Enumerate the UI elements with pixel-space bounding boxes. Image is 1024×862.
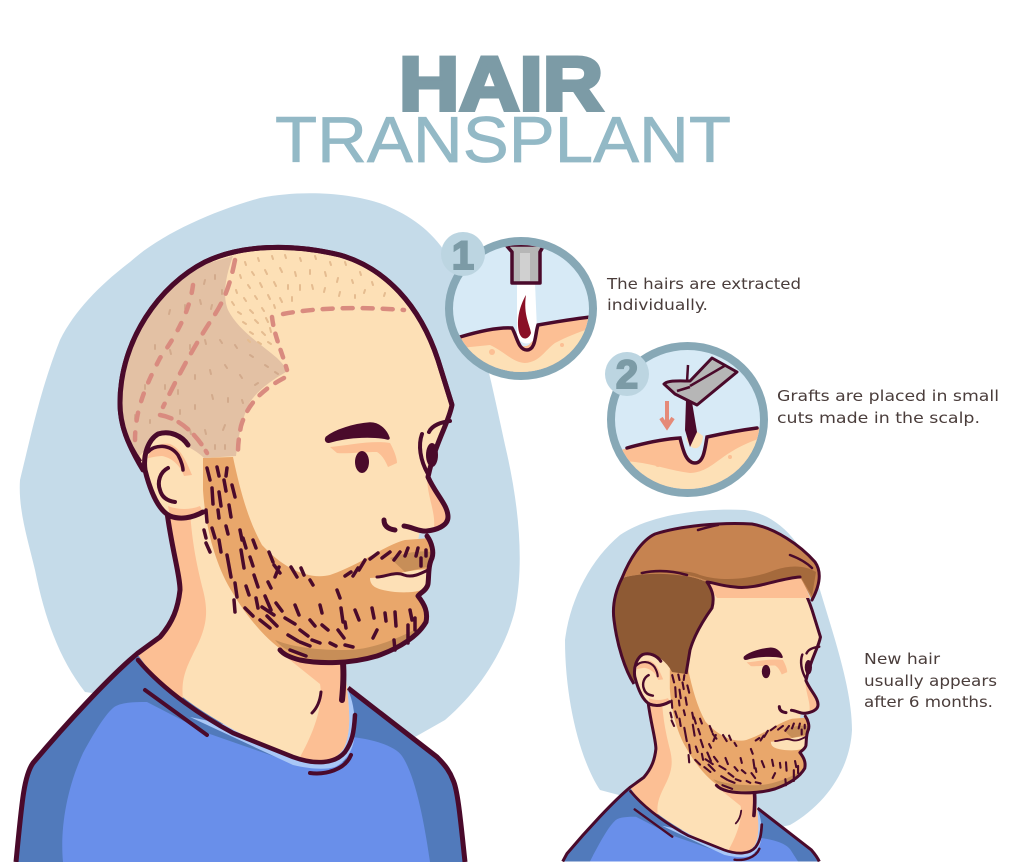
title word: HAIR: HAIR xyxy=(399,42,603,127)
shaved donor area xyxy=(121,256,286,458)
person base: neck, face, beard xyxy=(620,542,820,860)
shirt xyxy=(16,653,465,862)
dots xyxy=(656,466,660,467)
ear xyxy=(634,654,670,705)
hair side outline xyxy=(613,578,713,684)
caption: step 1 xyxy=(606,275,801,314)
caption: result: New hair xyxy=(864,650,941,668)
scalp stubble dots xyxy=(232,255,385,344)
hair follicle xyxy=(518,295,531,339)
caption: step 1: individually. xyxy=(607,296,708,314)
step 2 circle xyxy=(605,346,770,500)
ear xyxy=(145,433,203,518)
title xyxy=(275,42,731,176)
number badge 1 xyxy=(441,232,485,278)
hair strokes xyxy=(642,525,812,575)
number badge 2: 2 xyxy=(616,353,638,397)
head top outline xyxy=(120,247,452,462)
caption: step 1: The hairs are extracted xyxy=(606,275,801,293)
skin shade under fringe xyxy=(704,572,810,598)
background blob: large xyxy=(20,193,520,737)
skin layers xyxy=(460,317,588,372)
hair top outline xyxy=(622,523,819,600)
circle background xyxy=(611,346,764,493)
step 1 circle xyxy=(440,232,600,390)
caption: step 2 xyxy=(777,387,999,427)
caption: result: usually appears xyxy=(864,672,997,690)
skin layers xyxy=(622,428,760,489)
person before: shaved head with donor area xyxy=(16,247,465,862)
skin surface line xyxy=(460,317,590,350)
caption: result: after 6 months. xyxy=(864,693,993,711)
light beam xyxy=(517,283,537,343)
shaved area stubble dots xyxy=(135,275,278,449)
circle background xyxy=(449,241,593,376)
tool highlight xyxy=(520,253,530,281)
hair side xyxy=(613,573,713,684)
graft hair xyxy=(685,400,697,447)
extraction tool xyxy=(506,245,544,283)
dots xyxy=(489,349,495,355)
person after: grown hair xyxy=(563,523,820,861)
caption: step 2: cuts made in the scalp. xyxy=(777,409,980,427)
number badge 2 xyxy=(605,352,649,397)
down arrow xyxy=(661,401,673,427)
follicle highlight xyxy=(686,430,703,448)
person base: neck, face, beard xyxy=(120,247,452,773)
number badge 1: 1 xyxy=(452,234,474,278)
caption: result xyxy=(864,650,997,711)
shirt xyxy=(563,787,820,861)
skin surface line xyxy=(627,428,757,463)
hair shadow band xyxy=(640,566,816,596)
caption: step 2: Grafts are placed in small xyxy=(777,387,999,405)
title word: TRANSPLANT: TRANSPLANT xyxy=(275,103,731,176)
background blob: small xyxy=(565,510,852,832)
hair top xyxy=(622,523,819,600)
tweezers xyxy=(664,358,737,405)
dashed extraction outlines xyxy=(135,260,404,453)
